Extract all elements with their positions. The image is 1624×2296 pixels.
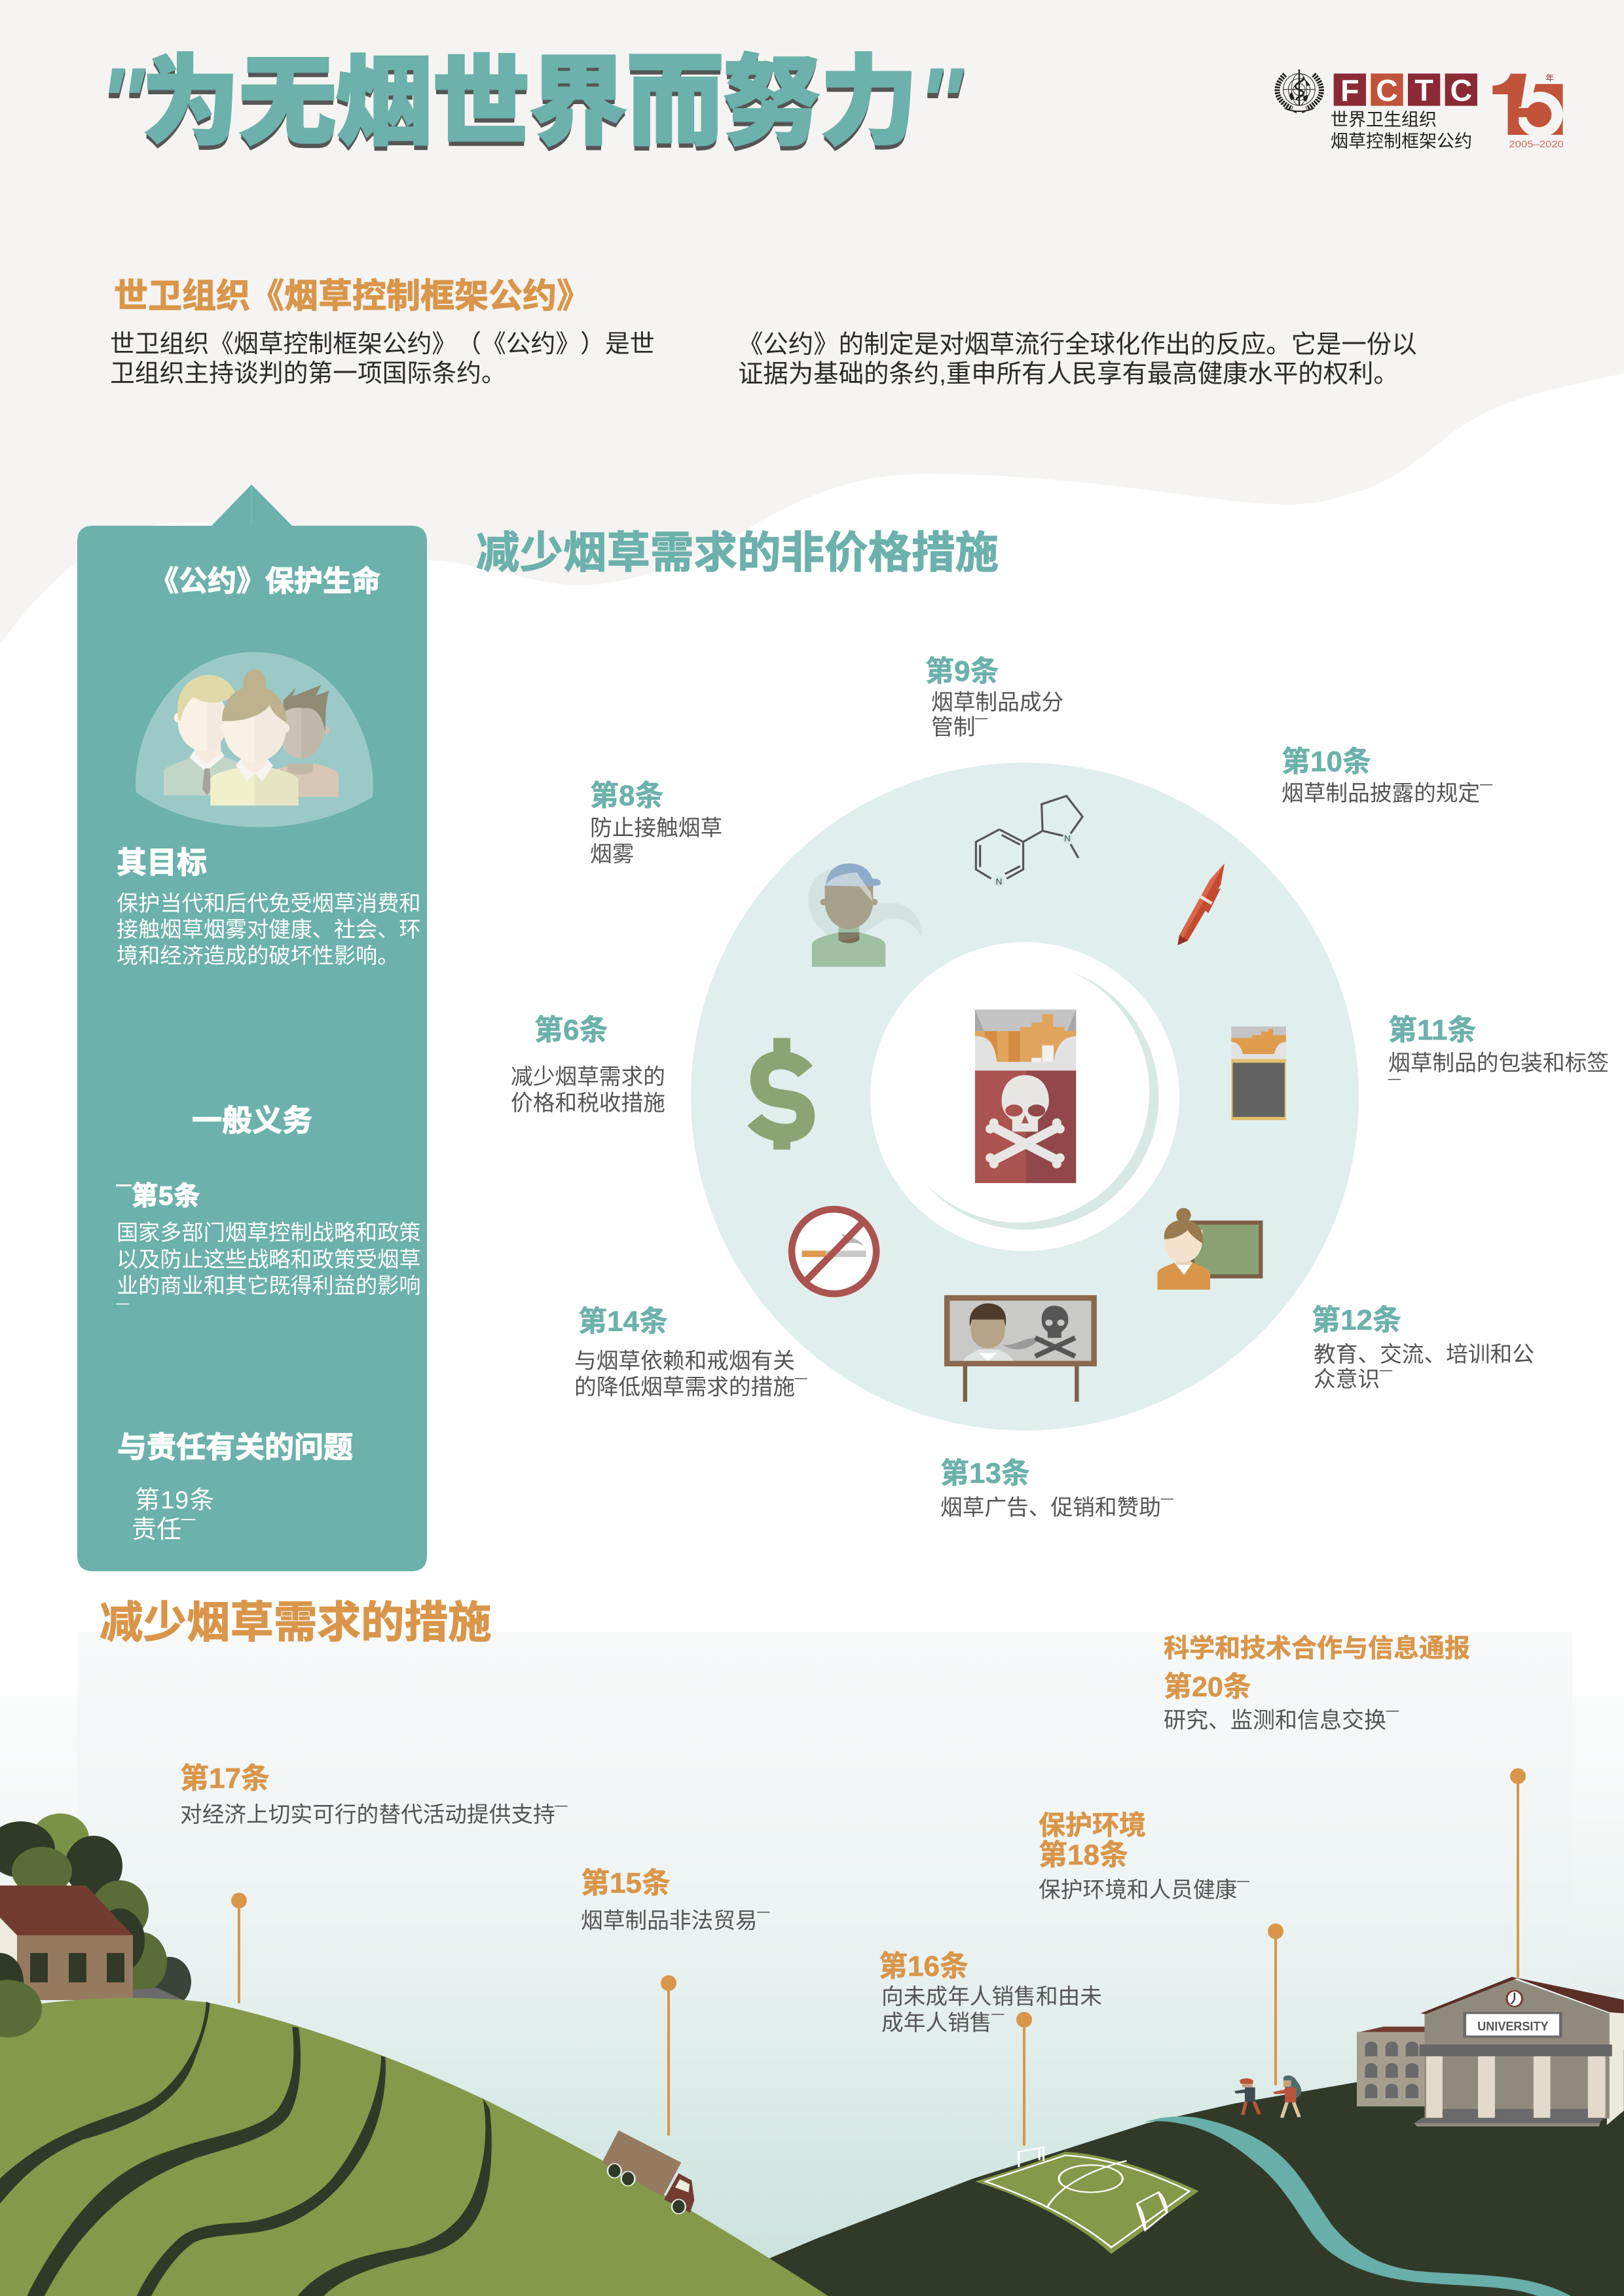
- central circle: [691, 763, 1359, 1430]
- article 9: [925, 655, 1063, 740]
- article 11: 第11条: [1388, 1014, 1477, 1046]
- icon: nicotine molecule: N: [996, 877, 1002, 886]
- article 11: ¯: [1388, 1076, 1401, 1101]
- general obligations heading: 一般义务: [192, 1104, 312, 1138]
- intro text right: 《公约》的制定是对烟草流行全球化作出的反应。它是一份以: [738, 331, 1417, 359]
- article 14: 的降低烟草需求的措施¯: [574, 1375, 807, 1400]
- liability heading: 与责任有关的问题: [117, 1430, 353, 1464]
- icon: nicotine molecule: N: [1064, 833, 1071, 843]
- article 20: [1164, 1634, 1470, 1733]
- article 12: 众意识¯: [1314, 1367, 1392, 1392]
- article 16: 第16条: [879, 1950, 969, 1982]
- panel heading: 《公约》保护生命: [150, 566, 380, 598]
- logo: WHO emblem: [1277, 69, 1321, 113]
- icon: billboard: [947, 1298, 1094, 1402]
- article 19: 第19条: [135, 1487, 215, 1514]
- panel: convention protects lives: [77, 484, 427, 1571]
- icon: dollar sign: [754, 1038, 805, 1150]
- article 8: 第8条: [590, 780, 663, 812]
- article 16: 向未成年人销售和由未: [881, 1984, 1102, 2009]
- section heading: measures: 减少烟草需求的措施: [100, 1599, 491, 1647]
- icon: truck: [602, 2130, 694, 2214]
- objective text: 境和经济造成的破坏性影响。: [117, 944, 399, 968]
- article 9: 管制¯: [931, 715, 987, 740]
- icon: pen: [1177, 864, 1225, 945]
- article 5 heading: ¯第5条: [117, 1182, 200, 1211]
- section heading: non-price measures: 减少烟草需求的非价格措施: [476, 529, 999, 577]
- landscape: dark hill: [720, 2049, 1624, 2296]
- article 6: 第6条: [534, 1014, 608, 1046]
- logo caption: [1331, 110, 1472, 151]
- article 11: 烟草制品的包装和标签: [1388, 1051, 1609, 1076]
- front trees: [0, 1953, 42, 2037]
- icon: football field: [975, 2147, 1198, 2254]
- article 19: 责任¯: [132, 1516, 195, 1544]
- landscape: river: [1145, 2117, 1571, 2296]
- article 18: 保护环境和人员健康¯: [1039, 1878, 1249, 1903]
- logo: 15 years mark: 2005–2020: [1509, 139, 1564, 150]
- intro text left: 世卫组织《烟草控制框架公约》（《公约》）是世: [110, 331, 655, 358]
- article 20: 科学和技术合作与信息通报: [1164, 1635, 1470, 1663]
- icon: cigarette pack with skull: [975, 1010, 1076, 1183]
- article 19: [132, 1487, 215, 1544]
- logo: FCTC tiles: [1334, 73, 1477, 107]
- sky gradient band: [0, 1696, 1624, 2296]
- article 10: 烟草制品披露的规定¯: [1282, 781, 1492, 806]
- article 16: [879, 1950, 1102, 2035]
- landscape: green terraced hill: [0, 1998, 845, 2296]
- article 11: [1388, 1014, 1609, 1101]
- article 9: 烟草制品成分: [931, 690, 1063, 715]
- intro text left: 卫组织主持谈判的第一项国际条约。: [110, 360, 506, 388]
- logo: FCTC tiles: C: [1450, 73, 1472, 107]
- article 6: 价格和税收措施: [511, 1091, 665, 1116]
- heading: WHO FCTC: 世卫组织《烟草控制框架公约》: [114, 278, 591, 316]
- article 12: 教育、交流、培训和公: [1314, 1342, 1534, 1367]
- icon: university building: UNIVERSITY: [1477, 2020, 1548, 2033]
- icon: no smoking: [792, 1209, 876, 1294]
- pin: article 17: [231, 1893, 247, 2003]
- article 5 text: ¯: [117, 1300, 128, 1325]
- article 15: [581, 1867, 770, 1933]
- article 13: [940, 1457, 1173, 1520]
- logo: FCTC tiles: C: [1376, 73, 1398, 107]
- article 20: 第20条: [1164, 1671, 1251, 1703]
- logo caption: 世界卫生组织: [1331, 110, 1437, 130]
- article 17: 第17条: [180, 1762, 270, 1795]
- article 17: 对经济上切实可行的替代活动提供支持¯: [180, 1802, 567, 1827]
- landscape: farmhouse: [0, 1886, 133, 2003]
- article 13: 烟草广告、促销和赞助¯: [940, 1495, 1173, 1520]
- article 10: [1282, 746, 1493, 806]
- article 15: 第15条: [581, 1867, 671, 1899]
- icon: university building: [1357, 1977, 1624, 2126]
- objective heading: 其目标: [117, 846, 207, 880]
- article 18: 保护环境: [1039, 1810, 1146, 1840]
- icon: children walking: [1234, 2075, 1301, 2118]
- landscape: trees: [0, 1813, 191, 2007]
- pin: article 15: [661, 1975, 676, 2136]
- icon: smoker: [809, 864, 922, 967]
- article 6: 减少烟草需求的: [511, 1065, 665, 1089]
- objective text: 接触烟草烟雾对健康、社会、环: [117, 918, 421, 942]
- intro text right: [738, 331, 1417, 388]
- icon: small cigarette pack: [1231, 1027, 1286, 1120]
- article 10: 第10条: [1282, 746, 1371, 778]
- logo caption: 烟草控制框架公约: [1331, 132, 1472, 151]
- article 9: 第9条: [925, 655, 999, 687]
- article 18: [1039, 1810, 1249, 1903]
- logo: 15 years mark: 年: [1545, 73, 1554, 82]
- article 8: [590, 780, 722, 867]
- pin: article 18: [1268, 1923, 1283, 2085]
- article 12: [1312, 1304, 1534, 1392]
- article 8: 防止接触烟草: [590, 816, 722, 841]
- logo: FCTC tiles: F: [1340, 73, 1359, 107]
- background wave: [0, 0, 1624, 645]
- logo: FCTC tiles: T: [1414, 73, 1433, 107]
- icon: teacher: [1157, 1208, 1261, 1290]
- article 13: 第13条: [940, 1457, 1030, 1489]
- article 5 text: 业的商业和其它既得利益的影响: [117, 1274, 421, 1298]
- article 18: 第18条: [1039, 1839, 1128, 1871]
- intro text left: [110, 331, 655, 388]
- article 17: [180, 1762, 568, 1827]
- objective text: [117, 892, 421, 968]
- article 14: 第14条: [578, 1305, 668, 1338]
- article 12: 第12条: [1312, 1304, 1401, 1336]
- pin: article 20: [1510, 1768, 1526, 1977]
- article 5 text: 以及防止这些战略和政策受烟草: [117, 1248, 421, 1271]
- pin: article 16: [1016, 2012, 1032, 2145]
- title: ": [98, 47, 143, 157]
- article 8: 烟雾: [590, 842, 634, 867]
- intro text right: 证据为基础的条约,重申所有人民享有最高健康水平的权利。: [738, 360, 1399, 388]
- article 14: [574, 1305, 807, 1400]
- article 5 text: [117, 1221, 421, 1325]
- article 5 text: 国家多部门烟草控制战略和政策: [117, 1221, 421, 1245]
- article 15: 烟草制品非法贸易¯: [581, 1908, 769, 1933]
- article 16: 成年人销售¯: [881, 2011, 1004, 2035]
- icon: nicotine molecule: [976, 796, 1082, 886]
- logo: 15 years mark: [1492, 73, 1574, 150]
- article 6: [511, 1014, 665, 1116]
- faint sky panel: [77, 1632, 1572, 2130]
- illustration: people under dome: [136, 652, 373, 827]
- article 14: 与烟草依赖和戒烟有关: [574, 1349, 795, 1374]
- title: 为无烟世界而努力": [141, 47, 962, 157]
- objective text: 保护当代和后代免受烟草消费和: [117, 892, 421, 916]
- article 20: 研究、监测和信息交换¯: [1164, 1708, 1399, 1733]
